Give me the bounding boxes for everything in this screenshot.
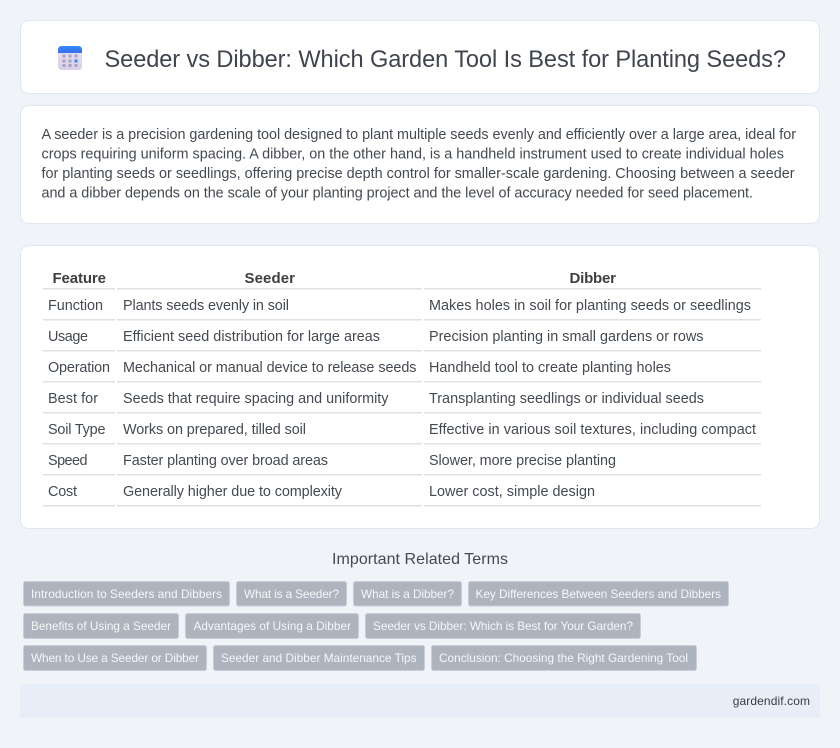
row: usage (48, 329, 704, 345)
row: usage: Precision planting in small gardens or rows (429, 329, 704, 345)
tag: conclusion (432, 646, 696, 670)
tag: maintenance (214, 646, 424, 670)
row: cost: Generally higher due to complexity (123, 484, 343, 500)
panel: comparison table (20, 246, 820, 528)
row: best for (48, 391, 704, 407)
panel: header (20, 20, 820, 94)
tag: conclusion: Conclusion: Choosing the Right Gardening Tool (439, 651, 688, 665)
row: function: Plants seeds evenly in soil (123, 298, 289, 314)
footer (20, 684, 820, 718)
tag: which is best: Seeder vs Dibber: Which is Best for Your Garden? (373, 619, 633, 633)
tag list (24, 582, 728, 670)
row: soil type: Soil Type (48, 422, 106, 438)
row: function (48, 298, 751, 314)
row: cost: Cost (48, 484, 77, 500)
tag: what is a seeder: What is a Seeder? (244, 587, 339, 601)
footer credit: gardendif.com (733, 694, 810, 708)
tag: advantages (186, 614, 358, 638)
row: operation: Mechanical or manual device to release seeds (123, 360, 416, 376)
row: operation (48, 360, 671, 376)
tag: key differences (468, 582, 728, 606)
intro text: for planting seeds or seedlings, offering precise depth control for smaller-scale gardening. Choosing between a seeder (42, 166, 795, 182)
row: best for: Best for (48, 391, 98, 407)
tag: introduction (24, 582, 230, 606)
row: soil type (48, 422, 756, 438)
intro text: crops requiring uniform spacing. A dibber, on the other hand, is a handheld instrument used to create individual holes (42, 146, 784, 162)
row: soil type: Works on prepared, tilled soil (123, 422, 306, 438)
tag: maintenance: Seeder and Dibber Maintenance Tips (221, 651, 417, 665)
intro text: A seeder is a precision gardening tool designed to plant multiple seeds evenly and efficiently over a large area, ideal for (42, 127, 796, 143)
row: cost: Lower cost, simple design (429, 484, 595, 500)
tag: key differences: Key Differences Between Seeders and Dibbers (476, 587, 721, 601)
table grid lines (43, 288, 761, 506)
tag: when to use (24, 646, 206, 670)
row: speed: Speed (48, 453, 88, 469)
row: usage: Usage (48, 329, 88, 345)
row: usage: Efficient seed distribution for large areas (123, 329, 380, 345)
heading: related terms: Important Related Terms (332, 551, 508, 568)
title: Seeder vs Dibber: Which Garden Tool Is Best for Planting Seeds? (104, 47, 786, 73)
row: function: Function (48, 298, 103, 314)
row: speed (48, 453, 616, 469)
panel: introduction (20, 106, 820, 224)
icon: calendar (58, 46, 82, 70)
tag: what is a dibber: What is a Dibber? (361, 587, 454, 601)
tag: introduction: Introduction to Seeders and Dibbers (31, 587, 222, 601)
tag: when to use: When to Use a Seeder or Dibber (31, 651, 199, 665)
intro text: and a dibber depends on the scale of your planting project and the level of accuracy needed for seed placement. (42, 186, 753, 202)
tag: benefits (24, 614, 178, 638)
row: soil type: Effective in various soil textures, including compact (429, 422, 756, 438)
tag: which is best (366, 614, 640, 638)
row: best for: Transplanting seedlings or individual seeds (429, 391, 704, 407)
row: speed: Slower, more precise planting (429, 453, 616, 469)
row: cost (48, 484, 595, 500)
tag: what is a dibber (354, 582, 462, 606)
table header row: Seeder (244, 270, 295, 287)
table header row: Dibber (570, 270, 616, 287)
tag: benefits: Benefits of Using a Seeder (31, 619, 171, 633)
table header row: Feature (52, 270, 106, 287)
tag: advantages: Advantages of Using a Dibber (194, 619, 351, 633)
row: operation: Operation (48, 360, 110, 376)
tag: what is a seeder (236, 582, 346, 606)
row: function: Makes holes in soil for planting seeds or seedlings (429, 298, 751, 314)
table header row (52, 270, 616, 287)
row: best for: Seeds that require spacing and uniformity (123, 391, 389, 407)
intro text (42, 127, 796, 202)
row: operation: Handheld tool to create planting holes (429, 360, 671, 376)
row: speed: Faster planting over broad areas (123, 453, 328, 469)
